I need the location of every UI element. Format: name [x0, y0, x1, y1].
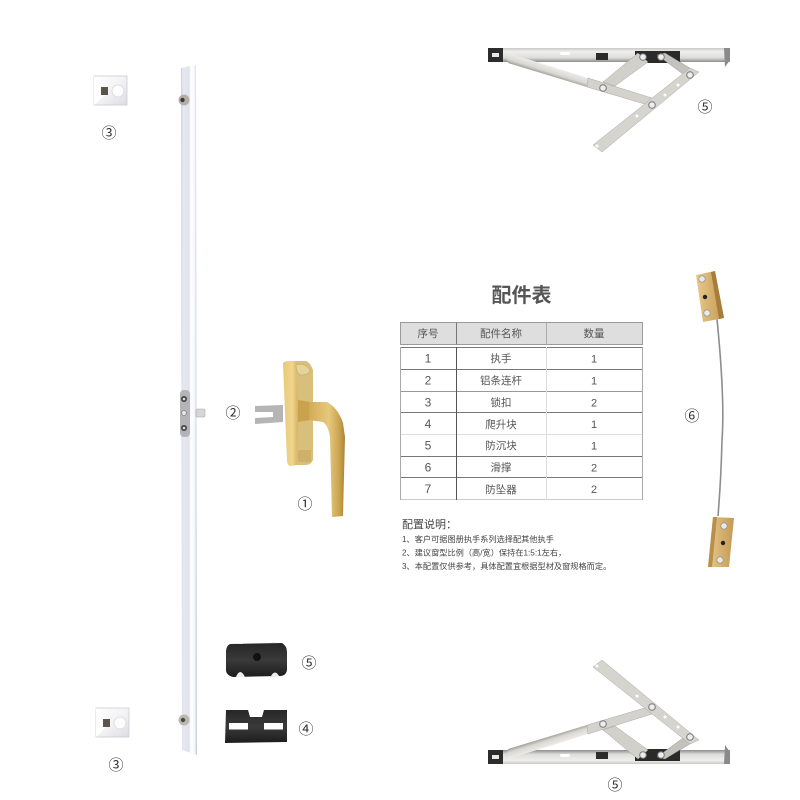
icon: black anti-sag block	[226, 642, 287, 677]
table rows: 2	[591, 484, 597, 496]
handle fork	[255, 405, 283, 424]
stay lower arm	[593, 68, 699, 152]
bottom stay track	[488, 750, 730, 764]
callout numbers	[101, 99, 713, 794]
table rows: 5	[425, 438, 432, 452]
icon: friction stay top	[488, 48, 730, 152]
callout numbers: ④	[298, 721, 314, 738]
table rows	[425, 352, 597, 496]
bottom stay lower arm	[593, 660, 699, 744]
icon: black climbing block	[225, 710, 287, 743]
centre mounting plate	[180, 390, 190, 437]
stay short links	[603, 53, 648, 86]
table rows: 6	[425, 460, 432, 474]
icon: keeper top	[94, 76, 127, 105]
table rows: 2	[591, 398, 597, 410]
callout numbers: ②	[225, 405, 241, 422]
table rows: 铝条连杆	[480, 374, 522, 387]
icon: keeper bottom	[96, 708, 129, 737]
callout numbers: ①	[297, 496, 313, 513]
cable top block	[696, 271, 724, 322]
icon: window handle	[255, 361, 345, 517]
table rows: 1	[591, 440, 597, 452]
table: parts list	[400, 322, 643, 500]
cable bottom block	[708, 517, 734, 567]
callout numbers: ⑥	[684, 408, 700, 425]
table rows: 防沉块	[485, 439, 517, 452]
table rows: 1	[591, 376, 597, 388]
title: 配件表	[492, 284, 552, 307]
table rows: 2	[591, 462, 597, 474]
bottom stay short links	[603, 726, 648, 759]
table rows: 7	[425, 482, 432, 496]
table rows: 1	[425, 352, 432, 366]
callout numbers: ⑤	[697, 99, 713, 116]
spindle pin	[196, 409, 205, 417]
handle lever	[309, 402, 345, 517]
table header: 数量	[584, 327, 605, 340]
table rows: 1	[591, 419, 597, 431]
aluminium connecting rod	[178, 65, 205, 755]
table rows: 1	[591, 354, 597, 366]
table rows: 防坠器	[485, 483, 517, 496]
table rows: 2	[425, 374, 432, 388]
icon: friction stay bottom	[488, 660, 730, 764]
bolt: bottom	[178, 714, 190, 726]
table rows: 爬升块	[485, 419, 517, 431]
handle collar	[298, 400, 311, 422]
stay track	[488, 48, 730, 62]
table header	[400, 322, 642, 344]
table header: 序号	[418, 327, 438, 340]
text block: configuration notes: 3、本配置仅供参考，具体配置宜根据型材及窗规格而定。	[402, 561, 611, 571]
table rows: 执手	[490, 352, 512, 365]
table rows: 3	[425, 396, 432, 410]
table rows: 滑撑	[490, 461, 512, 474]
handle back plate	[295, 361, 313, 465]
text block: configuration notes	[402, 517, 611, 571]
callout numbers: ⑤	[301, 655, 317, 672]
text block: configuration notes: 1、客户可据图册执手系列选择配其他执手	[402, 534, 554, 544]
table rows: 锁扣	[490, 396, 512, 409]
cable	[717, 319, 723, 516]
icon: anti-fall cable device	[696, 271, 734, 567]
handle front face	[283, 361, 298, 466]
table grid	[400, 347, 643, 500]
table header: 配件名称	[480, 327, 522, 340]
bottom stay upper arm	[505, 707, 652, 760]
stay upper arm	[505, 52, 652, 105]
callout numbers: ③	[108, 757, 124, 774]
table rows: 4	[425, 417, 432, 431]
text block: configuration notes: 2、建议窗型比例（高/宽）保持在1:5:1左右，	[402, 548, 566, 558]
callout numbers: ⑤	[607, 777, 623, 794]
bolt: top	[178, 94, 190, 106]
text block: configuration notes: 配置说明：	[402, 517, 457, 531]
callout numbers: ③	[101, 125, 117, 142]
